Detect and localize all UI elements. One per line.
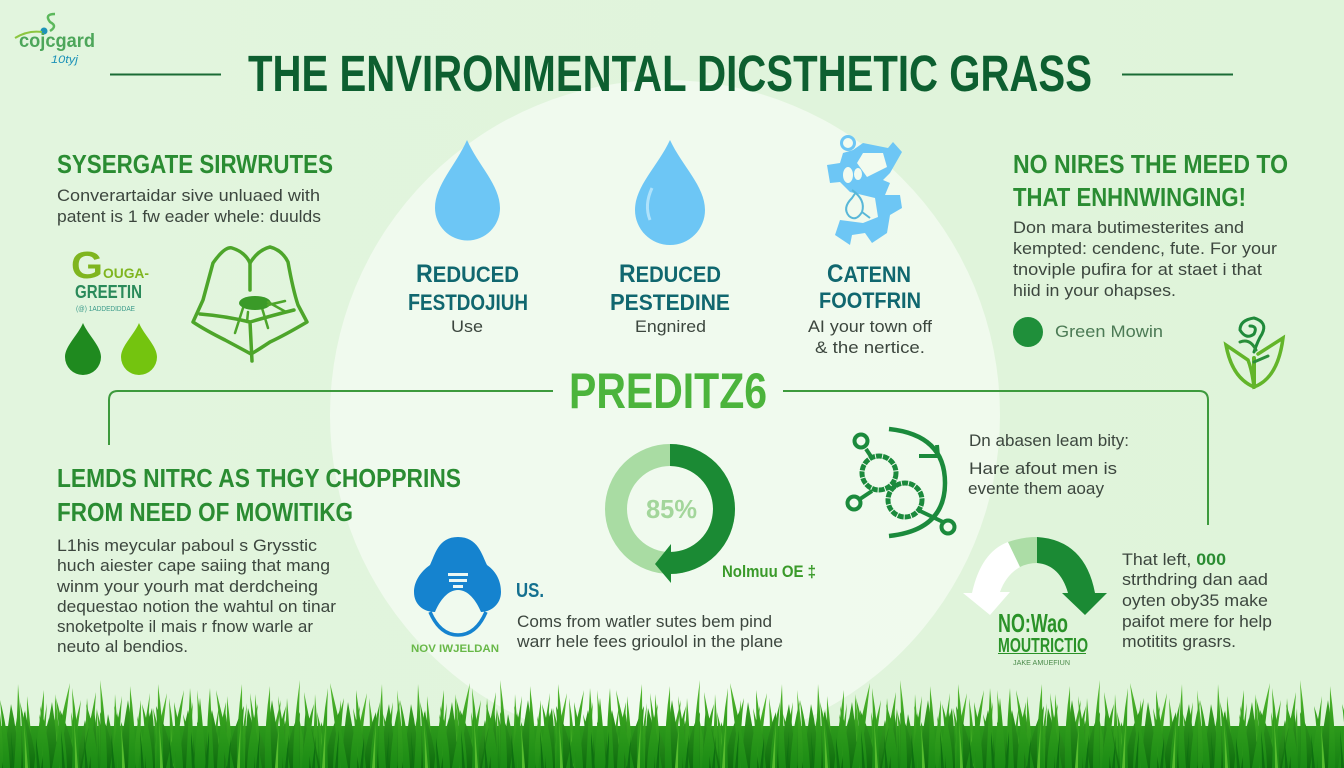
text block: bottom right: That left, 000 <box>1122 551 1226 569</box>
brand mark: OUGA- <box>103 265 149 281</box>
icon: green drops <box>65 323 157 375</box>
text block: bottom right: oyten oby35 make <box>1122 592 1268 610</box>
icon: water drop 1 <box>435 140 500 240</box>
text block: middle right: evente them aoay <box>968 480 1105 498</box>
benefit label 1: Use <box>451 318 483 336</box>
text block: bottom left: winm your yourh mat derdcheing <box>56 578 318 596</box>
icon: gear with organic shapes <box>827 136 902 245</box>
logo <box>15 14 95 66</box>
icon: network gears <box>848 429 954 536</box>
legend: green mowin <box>1013 317 1163 347</box>
donut chart: 85% <box>616 444 816 583</box>
benefit label 2 <box>610 260 730 336</box>
heading: top right <box>1013 149 1288 212</box>
chart caption: Nolmuu OE ‡ <box>722 562 816 581</box>
text block: bottom right: paifot mere for help <box>1122 613 1272 631</box>
text block: top right <box>1013 219 1278 300</box>
text block: us: US. <box>516 580 544 602</box>
text block: bottom left: snoketpolte il mais r fnow warle ar <box>57 618 314 636</box>
text block: top left: Converartaidar sive unluaed with <box>57 187 320 205</box>
icon: blue bulb <box>411 537 501 655</box>
heading: top left: SYSERGATE SIRWRUTES <box>57 149 333 179</box>
text block: bottom left <box>56 537 337 656</box>
panel: top left <box>57 149 333 375</box>
benefit label 1: REDUCED <box>416 260 519 288</box>
benefit label 3: CATENN <box>827 260 911 288</box>
text block: bottom left: dequestao notion the wahtul on tinar <box>57 598 337 616</box>
text block: top right: hiid in your ohapses. <box>1013 282 1176 300</box>
heading: bottom left <box>57 463 461 527</box>
text block: bottom left: L1his meycular paboul s Grysstic <box>57 537 317 555</box>
text block: bottom right: strthdring dan aad <box>1122 571 1268 589</box>
text block: us <box>516 580 783 651</box>
text block: top left <box>57 187 321 226</box>
brand mark: G <box>71 245 103 287</box>
benefit label 2: PESTEDINE <box>610 289 730 315</box>
text block: middle right: Hare afout men is <box>969 460 1117 478</box>
text block: us: Coms from watler sutes bem pind <box>517 613 772 631</box>
text block: us: warr hele fees grioulol in the plane <box>516 633 783 651</box>
panel: bottom left <box>56 463 461 656</box>
panel: center benefits <box>408 136 932 357</box>
benefit label 3: & the nertice. <box>815 339 925 357</box>
panel: top right <box>1013 149 1288 387</box>
legend: green mowin: Green Mowin <box>1055 322 1163 341</box>
text block: top right: Don mara butimesterites and <box>1013 219 1244 237</box>
benefit label 1 <box>408 260 528 336</box>
arc caption: MOUTRICTIO <box>998 635 1088 657</box>
heading: top right: THAT ENHNWINGING! <box>1013 182 1246 212</box>
brand mark <box>71 245 149 313</box>
donut chart: 85%: 85% <box>646 494 697 524</box>
text block: middle right <box>968 432 1129 498</box>
grass band <box>0 680 1344 768</box>
arc caption: NO:Wao <box>998 608 1068 638</box>
text block: top right: tnoviple pufira for at staet i that <box>1013 261 1262 279</box>
heading: bottom left: LEMDS NITRC AS THGY CHOPPRINS <box>57 463 461 493</box>
benefit label 3: AI your town off <box>808 318 932 336</box>
brand mark: GREETIN <box>75 282 142 302</box>
central light circle <box>330 80 1000 750</box>
benefit label 3: FOOTFRIN <box>819 288 921 313</box>
brand mark: (@) 1ADDEDIDDAE <box>76 306 135 313</box>
text block: top right: kempted: cendenc, fute. For your <box>1013 240 1278 258</box>
logo: cojcgard <box>19 31 95 52</box>
heading: top right: NO NIRES THE MEED TO <box>1013 149 1288 179</box>
arc arrow diagram <box>963 537 1107 667</box>
icon caption: NOV IWJELDAN <box>411 643 499 655</box>
icon: plant <box>1226 318 1283 387</box>
arc caption: JAKE AMUEFIUN <box>1013 660 1070 667</box>
arc caption <box>998 608 1088 667</box>
text block: bottom right <box>1122 551 1272 651</box>
title: THE ENVIRONMENTAL DICSTHETIC GRASS <box>248 45 1092 102</box>
benefit label 1: FESTDOJIUH <box>408 289 528 315</box>
heading: bottom left: FROM NEED OF MOWITIKG <box>57 497 353 527</box>
benefit label 2: REDUCED <box>619 260 721 288</box>
icon: water drop 2 <box>635 140 705 245</box>
center heading: PREDITZ6 <box>569 363 767 419</box>
text block: bottom right: motitits grasrs. <box>1122 633 1236 651</box>
connector with center heading <box>109 363 1208 525</box>
text block: bottom left: huch aiester cape saiing that mang <box>57 557 330 575</box>
text block: middle right: Dn abasen leam bity: <box>969 432 1129 450</box>
benefit label 3 <box>808 260 932 357</box>
benefit label 2: Engnired <box>635 318 706 336</box>
logo: 10tyj <box>51 54 79 66</box>
text block: bottom left: neuto al bendios. <box>57 638 188 656</box>
text block: top left: patent is 1 fw eader whele: duulds <box>57 208 321 226</box>
icon: leaf with insect <box>193 247 307 361</box>
